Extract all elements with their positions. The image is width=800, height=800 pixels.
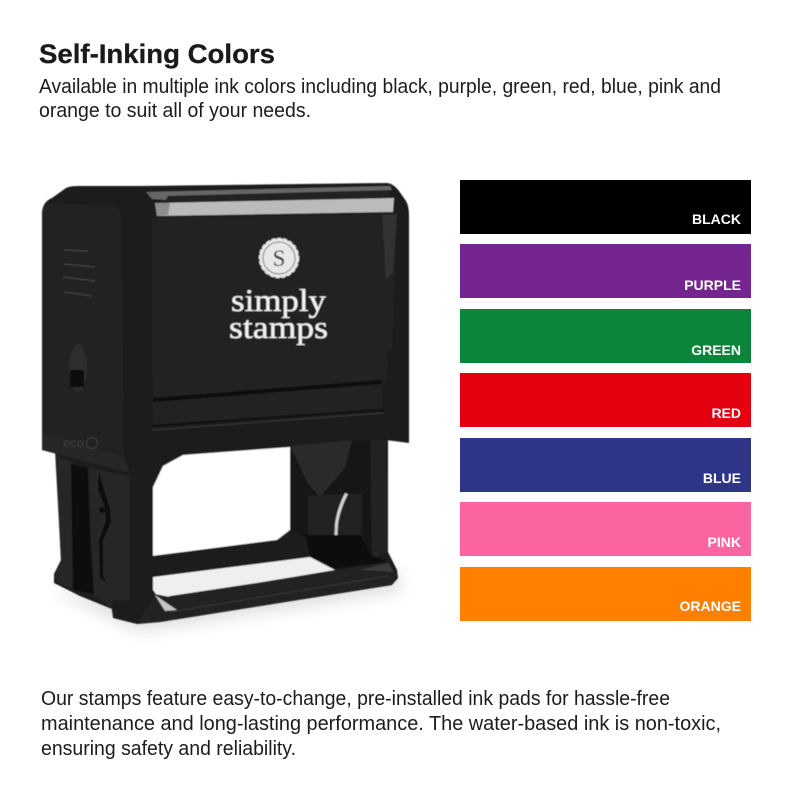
swatch: blue: [460, 438, 751, 492]
front panel: [152, 214, 397, 376]
side panel: [42, 203, 124, 455]
top window: [146, 186, 392, 200]
bottom description: Our stamps feature easy-to-change, pre-installed ink pads for hassle-free: [41, 688, 670, 710]
swatch: black: [460, 180, 751, 234]
swatch: purple: PURPLE: [684, 277, 741, 293]
swatch: green: GREEN: [691, 342, 741, 358]
stamp illustration: [42, 183, 409, 632]
intro text: Available in multiple ink colors including black, purple, green, red, blue, pink and: [39, 76, 721, 98]
eco mark: eco: [63, 435, 84, 450]
logo wordmark: [229, 282, 328, 345]
logo: simply stamps: [229, 238, 328, 345]
title: Self-Inking Colors: [39, 39, 275, 69]
white front opening: [153, 447, 290, 556]
swatch: red: RED: [711, 405, 741, 421]
swatch: orange: ORANGE: [680, 598, 741, 614]
bottom description: maintenance and long-lasting performance. The water-based ink is non-toxic,: [41, 713, 721, 735]
bottom description: ensuring safety and reliability.: [41, 738, 296, 760]
stamp body: [42, 183, 409, 473]
crossbar: [152, 530, 310, 577]
swatch: red: [460, 373, 751, 427]
foot plate: [137, 562, 397, 624]
white lower opening: [153, 557, 335, 600]
left leg detail: [54, 455, 73, 588]
logo wordmark: stamps: [229, 309, 328, 345]
right inner mechanism: [290, 436, 382, 570]
color swatches: [460, 180, 751, 621]
swatch: blue: BLUE: [703, 470, 741, 486]
grip lines: [63, 250, 95, 296]
swatch: pink: PINK: [708, 534, 741, 550]
logo badge: S: [273, 246, 285, 271]
swatch: green: [460, 309, 751, 363]
intro text: orange to suit all of your needs.: [39, 100, 311, 122]
swatch: black: BLACK: [692, 211, 741, 227]
side latch: [69, 344, 87, 392]
swatch: pink: [460, 502, 751, 556]
swatch: orange: [460, 567, 751, 621]
body ledges: [153, 351, 388, 400]
logo wordmark: simply: [231, 282, 326, 318]
stamp base and legs: [54, 430, 398, 624]
swatch: purple: [460, 244, 751, 298]
bottom description: [41, 688, 721, 760]
intro text: [39, 76, 721, 122]
eco mark: [63, 435, 98, 450]
floor shadow: [50, 570, 400, 632]
